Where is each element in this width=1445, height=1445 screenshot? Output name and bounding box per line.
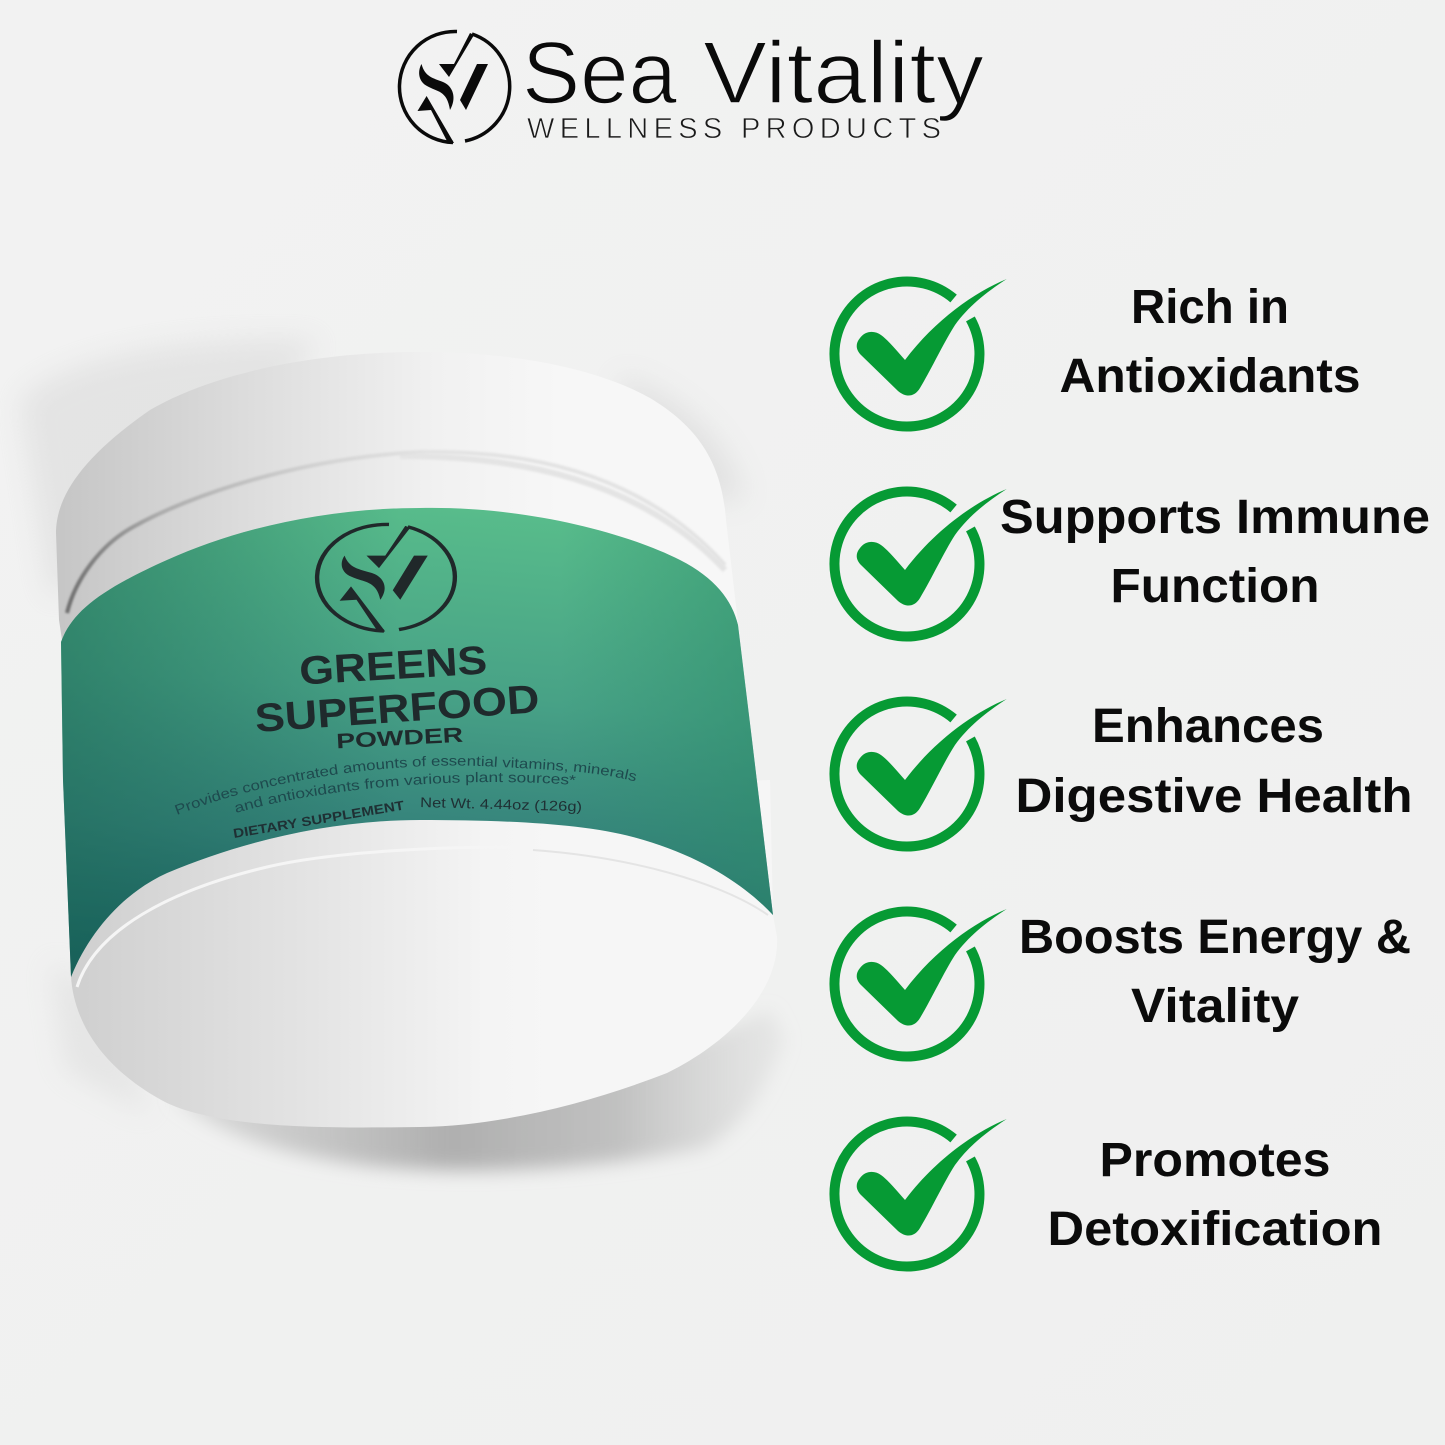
icon: green check [834,909,1007,1057]
benefit text: Rich in [1131,281,1289,334]
label footer: DIETARY SUPPLEMENT [232,798,405,841]
label footer: Net Wt. 4.44oz (126g) [420,794,582,814]
benefit text: Enhances [1092,700,1324,753]
jar label: SUPERFOOD [253,677,541,741]
lid groove [67,452,725,613]
benefit: immune function [834,489,1430,637]
benefit: energy and vitality: Vitality [1131,980,1299,1033]
benefit: energy and vitality [834,909,1411,1057]
benefit: detoxification [834,1119,1382,1267]
benefit text: Boosts Energy & [1019,911,1411,964]
benefit: rich in antioxidants [834,279,1360,427]
benefit: immune function: Function [1110,560,1320,613]
jar lid [56,352,740,700]
label logo [317,524,455,631]
label description: Provides concentrated amounts of essential vitamins, minerals, [174,756,636,814]
brand name: Vitality [703,23,984,122]
brand tagline: WELLNESS PRODUCTS [527,113,941,145]
label title: GREENS [298,638,488,694]
jar base [71,780,777,1127]
label footer [232,794,582,841]
label description [174,756,636,814]
icon: green check [834,699,1007,847]
jar label [61,508,773,977]
base rim [77,847,768,987]
label description: and antioxidants from various plant sources* [236,772,576,812]
benefit: digestive health: Digestive Health [1016,770,1412,823]
icon: green check [834,489,1007,637]
benefit text: Supports Immune [1000,491,1430,544]
benefit: digestive health [834,699,1412,847]
logo icon [399,31,510,143]
benefit: rich in antioxidants: Antioxidants [1060,350,1360,403]
label band [61,508,773,977]
brand name: Sea [522,23,677,122]
benefit: detoxification: Detoxification [1048,1203,1382,1256]
icon: green check [834,1119,1007,1267]
product jar [26,343,776,1180]
jar shadows [20,339,785,1170]
icon: green check [834,279,1007,427]
benefit text: Promotes [1100,1134,1330,1187]
brand logo [399,23,984,145]
label subtitle: POWDER [336,724,464,753]
